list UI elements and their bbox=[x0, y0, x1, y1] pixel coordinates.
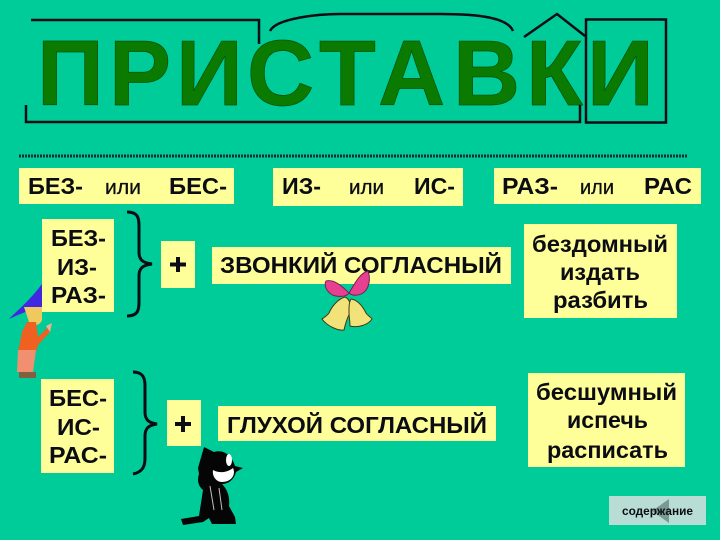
box: БЕЗ- или БЕС-: БЕС- bbox=[169, 173, 227, 199]
box: ЗВОНКИЙ СОГЛАСНЫЙ bbox=[212, 247, 511, 284]
box: РАЗ- или РАС bbox=[494, 168, 701, 204]
plus box: voiced bbox=[161, 241, 195, 288]
box: voiced examples bbox=[524, 224, 677, 318]
brace: voiced bbox=[127, 212, 152, 316]
root arc bbox=[270, 14, 513, 31]
icon: black cat bbox=[181, 447, 243, 525]
box: voiced prefixes: ИЗ- bbox=[57, 254, 97, 280]
box: РАЗ- или РАС: РАС bbox=[644, 173, 692, 199]
suffix mark bbox=[524, 14, 585, 37]
box: ИЗ- или ИС-: ИС- bbox=[414, 173, 455, 199]
box: voiceless prefixes: БЕС- bbox=[49, 385, 107, 411]
box: ЗВОНКИЙ СОГЛАСНЫЙ: ЗВОНКИЙ СОГЛАСНЫЙ bbox=[220, 251, 502, 278]
box: voiced examples: бездомный bbox=[532, 231, 668, 257]
icon: bells bbox=[322, 271, 372, 330]
box: ГЛУХОЙ СОГЛАСНЫЙ bbox=[218, 406, 496, 441]
box: БЕЗ- или БЕС-: БЕЗ- bbox=[28, 173, 83, 199]
box: voiced examples: издать bbox=[560, 259, 640, 285]
box: voiced prefixes bbox=[42, 219, 114, 312]
box: ГЛУХОЙ СОГЛАСНЫЙ: ГЛУХОЙ СОГЛАСНЫЙ bbox=[227, 411, 487, 438]
box: voiceless prefixes bbox=[41, 379, 114, 473]
prefix mark bbox=[31, 20, 259, 44]
brace: voiceless bbox=[133, 372, 157, 474]
box: voiceless examples: испечь bbox=[567, 407, 648, 433]
button: содержание bbox=[609, 496, 706, 525]
box: voiceless prefixes: РАС- bbox=[49, 442, 107, 468]
title: ПРИСТАВКИ with morpheme marks bbox=[26, 14, 666, 125]
box: ИЗ- или ИС- bbox=[273, 168, 463, 206]
plus box: voiceless bbox=[167, 400, 201, 446]
icon: boy in blue hat bbox=[9, 284, 52, 378]
box: ИЗ- или ИС-: ИЗ- bbox=[282, 173, 321, 199]
button: содержание: содержание bbox=[622, 504, 693, 518]
box: БЕЗ- или БЕС-: или bbox=[105, 177, 141, 199]
title text: ПРИСТАВКИ bbox=[37, 21, 654, 125]
ending box bbox=[586, 20, 666, 122]
box: voiced prefixes: РАЗ- bbox=[51, 282, 106, 308]
stem bracket bbox=[26, 105, 580, 122]
box: РАЗ- или РАС: или bbox=[580, 177, 614, 199]
box: voiceless examples bbox=[528, 373, 685, 467]
box: РАЗ- или РАС: РАЗ- bbox=[502, 173, 558, 199]
box: БЕЗ- или БЕС- bbox=[19, 168, 234, 204]
box: voiceless examples: бесшумный bbox=[536, 379, 677, 405]
box: voiced prefixes: БЕЗ- bbox=[51, 225, 106, 251]
box: voiceless examples: расписать bbox=[547, 437, 668, 463]
box: voiceless prefixes: ИС- bbox=[57, 414, 100, 440]
box: ИЗ- или ИС-: или bbox=[349, 177, 384, 199]
box: voiced examples: разбить bbox=[553, 287, 648, 313]
